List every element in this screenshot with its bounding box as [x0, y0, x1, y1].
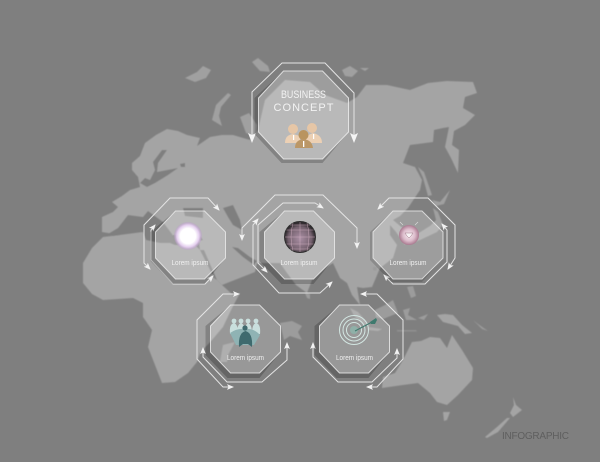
label: Lorem ipsum	[390, 260, 427, 267]
map: seas	[108, 150, 257, 280]
icon: globe	[284, 222, 316, 252]
panel and shadow	[370, 211, 443, 282]
world map	[83, 58, 522, 438]
footer label: INFOGRAPHIC	[502, 431, 569, 442]
label: Lorem ipsum	[227, 355, 264, 362]
octagon: bottom left	[197, 294, 287, 387]
map: eurasia	[102, 80, 477, 305]
connector lines	[378, 198, 455, 284]
icon: target with dart	[340, 316, 377, 344]
icon: business people	[285, 123, 322, 148]
panel and shadow	[150, 211, 226, 284]
panel and shadow	[206, 305, 280, 378]
connector lines	[197, 294, 287, 387]
map: tasmania	[443, 412, 450, 421]
octagon: bottom right	[313, 294, 403, 387]
map: southeast asia islands	[220, 267, 488, 362]
octagon: business concept	[252, 63, 354, 163]
connector lines	[252, 63, 354, 142]
heading business: BUSINESS	[281, 89, 326, 101]
panel and shadow	[260, 211, 334, 284]
panel and shadow	[254, 71, 348, 163]
octagon: right	[370, 198, 455, 284]
map: new guinea	[437, 314, 472, 334]
octagon: left	[144, 198, 226, 284]
map: new zealand	[485, 397, 522, 438]
octagon: center	[242, 195, 357, 293]
icon: pink badge	[399, 222, 419, 245]
map: arctic islands and sakhalin, japan	[185, 58, 450, 244]
connector lines	[313, 294, 403, 387]
connector lines	[144, 198, 219, 284]
map: africa	[83, 235, 240, 383]
icon: glowing orb	[174, 222, 202, 250]
connector lines	[242, 195, 357, 293]
label: Lorem ipsum	[336, 355, 373, 362]
label: Lorem ipsum	[280, 260, 318, 267]
label: Lorem ipsum	[172, 260, 209, 267]
icon: team group	[230, 319, 260, 347]
heading concept: CONCEPT	[274, 102, 334, 114]
panel and shadow	[314, 305, 390, 378]
map: australia	[382, 335, 473, 405]
